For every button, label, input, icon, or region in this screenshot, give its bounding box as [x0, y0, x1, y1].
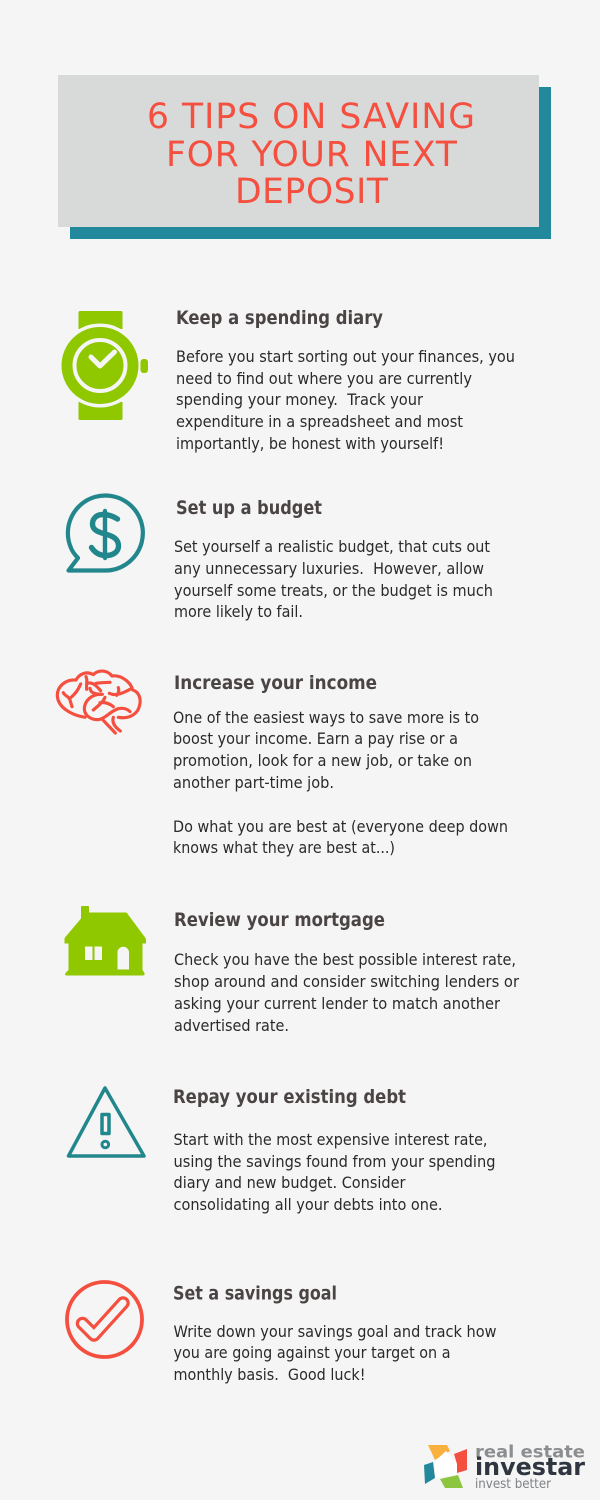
body text: boost your income. Earn a pay rise or a — [173, 729, 458, 748]
body text: more likely to fail. — [174, 602, 303, 621]
body text: knows what they are best at...) — [173, 838, 395, 857]
body text: expenditure in a spreadsheet and most — [176, 412, 463, 431]
title banner — [58, 75, 551, 239]
body text: advertised rate. — [174, 1016, 289, 1035]
body text: One of the easiest ways to save more is to — [173, 708, 479, 727]
body text: need to find out where you are currently — [176, 369, 472, 388]
body text: promotion, look for a new job, or take on — [173, 751, 472, 770]
body text: another part-time job. — [173, 773, 334, 792]
icon: warning triangle — [68, 1088, 144, 1156]
body text: any unnecessary luxuries. However, allow — [174, 559, 484, 578]
icon: brain — [57, 671, 140, 733]
body text: Do what you are best at (everyone deep down — [173, 817, 508, 836]
heading: Review your mortgage — [174, 910, 385, 931]
body text: yourself some treats, or the budget is much — [174, 581, 493, 600]
tip 1: spending diary — [58, 308, 515, 453]
body text: Write down your savings goal and track how — [174, 1322, 497, 1341]
body text — [173, 708, 508, 857]
icon: watch — [58, 311, 148, 420]
body text: you are going against your target on a — [174, 1343, 450, 1362]
heading: Increase your income — [174, 673, 377, 694]
banner panel — [58, 75, 539, 227]
tip 5: debt — [68, 1087, 496, 1214]
icon: dollar speech bubble — [68, 496, 143, 570]
title text — [147, 97, 475, 212]
body text — [174, 950, 519, 1035]
body text: using the savings found from your spending — [174, 1152, 496, 1171]
tip 4: mortgage — [64, 906, 519, 1035]
heading: Set up a budget — [176, 498, 322, 519]
title text: FOR YOUR NEXT — [166, 135, 458, 175]
body text: Set yourself a realistic budget, that cuts out — [174, 537, 490, 556]
heading: Set a savings goal — [173, 1284, 337, 1304]
logo wordmark: real estate — [475, 1442, 585, 1462]
body text — [174, 1130, 496, 1214]
heading: Repay your existing debt — [173, 1087, 406, 1108]
body text: spending your money. Track your — [176, 390, 423, 409]
body text: consolidating all your debts into one. — [174, 1195, 442, 1214]
body text: Before you start sorting out your finances, you — [176, 347, 515, 366]
banner shadow — [70, 87, 551, 239]
title text: DEPOSIT — [235, 172, 389, 212]
body text — [176, 347, 515, 453]
body text: Check you have the best possible interest rate, — [174, 950, 516, 969]
icon: house — [64, 906, 146, 976]
logo mark — [424, 1445, 467, 1488]
tip 6: goal — [67, 1282, 497, 1384]
logo wordmark: investar — [475, 1453, 585, 1481]
heading: Keep a spending diary — [176, 308, 383, 329]
icon: check circle — [67, 1282, 142, 1357]
body text: shop around and consider switching lenders or — [174, 972, 519, 991]
logo wordmark: invest better — [475, 1477, 552, 1492]
logo wordmark — [475, 1442, 585, 1492]
body text: asking your current lender to match another — [174, 994, 500, 1013]
body text — [174, 1322, 497, 1384]
body text: importantly, be honest with yourself! — [176, 434, 444, 453]
tip 3: income — [57, 671, 508, 857]
body text — [174, 537, 493, 621]
title text: 6 TIPS ON SAVING — [147, 97, 475, 137]
body text: diary and new budget. Consider — [174, 1173, 406, 1192]
tip 2: budget — [68, 496, 493, 621]
logo: real estate investar — [424, 1442, 585, 1492]
body text: monthly basis. Good luck! — [174, 1365, 366, 1384]
body text: Start with the most expensive interest rate, — [174, 1130, 488, 1149]
